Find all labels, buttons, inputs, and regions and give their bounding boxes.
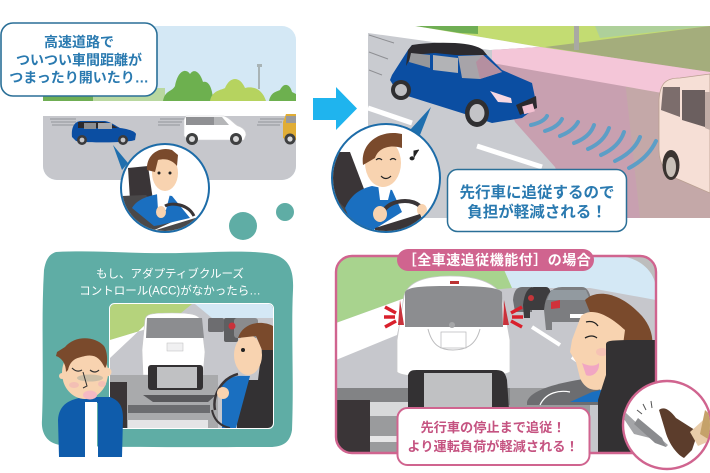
panel: full-speed following (336, 256, 656, 453)
roadside background (416, 26, 710, 58)
white van rear with brake lights (384, 276, 523, 377)
white car small (184, 116, 246, 145)
arrow (313, 87, 357, 130)
heading text: もし、アダプティブクルーズ (96, 266, 244, 280)
road markings (368, 108, 412, 123)
speed lines (50, 119, 76, 125)
tag: full-speed following heading: ［全車速追従機能付］の場合 (403, 252, 591, 268)
callout: tailgating caption: つまったり開いたり… (9, 70, 149, 86)
icon: foot on brake pedal (622, 381, 710, 469)
traffic ahead (513, 287, 594, 330)
radar waves (531, 116, 656, 168)
panel: highway scene (43, 26, 296, 180)
tag: full-speed following heading (397, 249, 594, 271)
seat (598, 340, 656, 453)
icon: worried driver circle (113, 144, 210, 235)
treeline (43, 71, 296, 101)
lamp post (258, 65, 260, 89)
white van silhouette through pink zone (659, 74, 710, 193)
driver (237, 348, 273, 428)
white road shoulder (43, 101, 296, 116)
callout: ACC benefit (448, 170, 626, 232)
heading text (79, 266, 261, 298)
callout: tailgating caption: 高速道路で (44, 34, 114, 50)
decorative thought bubbles (229, 203, 294, 240)
icon: tired man (56, 338, 127, 457)
callout: ACC benefit: 先行車に追従するので (459, 184, 615, 202)
sensor beam (492, 47, 710, 218)
blue car small (72, 121, 136, 145)
navigation screen (408, 370, 509, 407)
traffic ahead (208, 318, 258, 342)
road (43, 116, 296, 180)
smiling driver (570, 294, 652, 390)
white van rear (142, 313, 205, 375)
navigation screen (148, 365, 203, 390)
panel: ACC following scene (368, 26, 710, 218)
callout: stop-and-go benefit: より運転負荷が軽減される！ (407, 438, 579, 454)
dashboard (370, 388, 590, 452)
heading text: コントロール(ACC)がなかったら… (79, 284, 261, 298)
yellow car partial (283, 114, 296, 144)
callout: ACC benefit: 負担が軽減される！ (467, 202, 607, 221)
inset: cabin view (110, 304, 273, 428)
panel: without ACC (42, 251, 293, 457)
steering wheel (527, 377, 600, 405)
callout: stop-and-go benefit: 先行車の停止まで追従！ (420, 419, 566, 435)
icon: happy driver circle (332, 124, 440, 236)
callout: tailgating caption (1, 23, 157, 96)
dashboard (110, 375, 218, 428)
road stripes (531, 326, 576, 362)
callout: stop-and-go benefit (398, 408, 590, 465)
icon: pointer tail from car to driver (410, 107, 431, 135)
blue car large (390, 43, 537, 127)
callout: tailgating caption: ついつい車間距離が (16, 52, 142, 68)
